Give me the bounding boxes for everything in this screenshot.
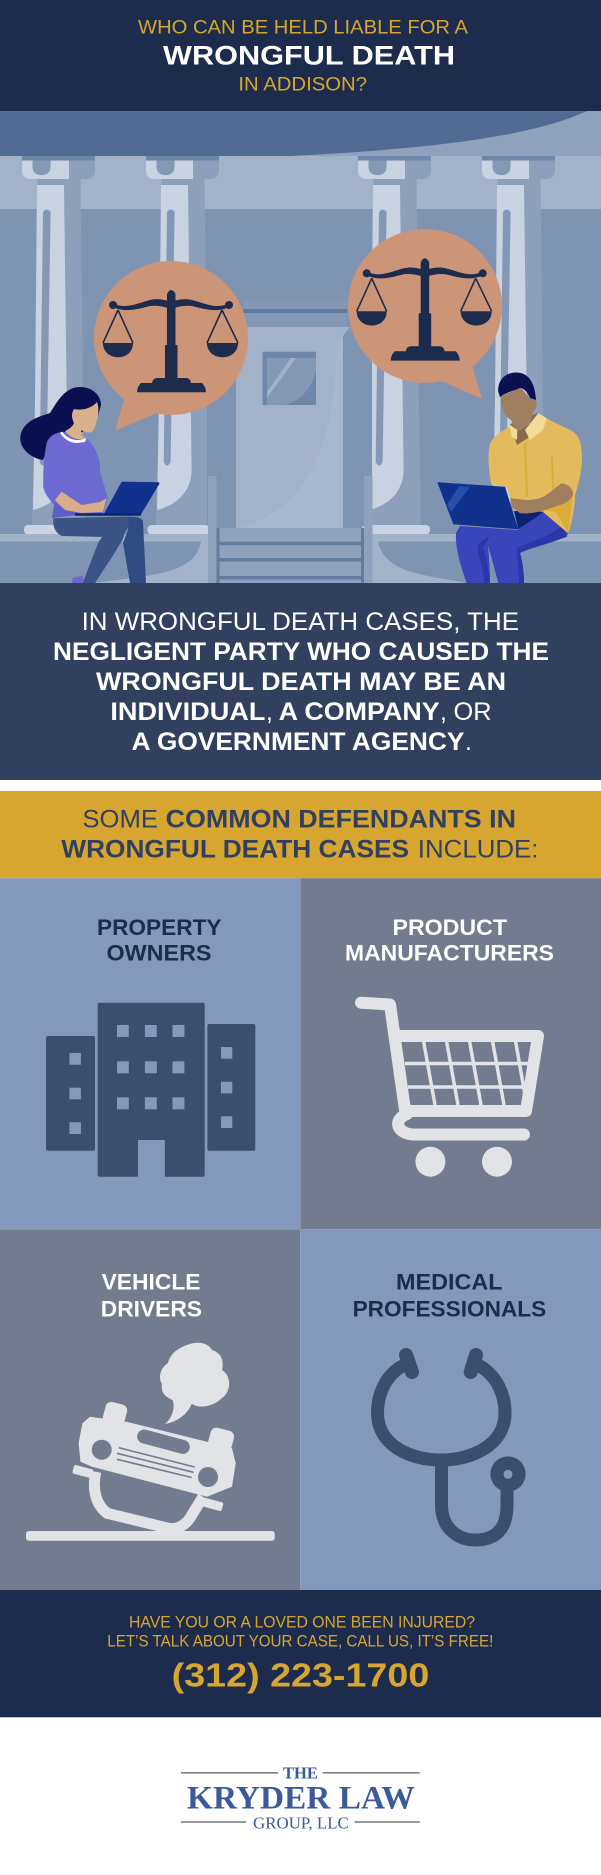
icon: buildings xyxy=(46,1003,255,1177)
gold heading band: SOME xyxy=(82,807,158,834)
speech bubble with scales: left xyxy=(94,261,248,431)
statement panel: IN WRONGFUL DEATH CASES, THE xyxy=(82,609,519,636)
panel: property owners: OWNERS xyxy=(106,941,212,966)
forearm xyxy=(510,483,573,514)
panel: property owners: PROPERTY xyxy=(97,915,222,940)
panel: vehicle drivers xyxy=(0,1229,300,1590)
icon: stethoscope xyxy=(378,1355,526,1540)
neck xyxy=(510,413,538,445)
plinths and steps xyxy=(0,476,601,583)
panel: product manufacturers: PRODUCT xyxy=(392,915,508,940)
panel: medical professionals: PROFESSIONALS xyxy=(353,1297,546,1322)
law firm logo: THE xyxy=(283,1763,318,1782)
gold heading band xyxy=(0,791,601,878)
statement panel: , xyxy=(266,699,273,726)
panel: medical professionals xyxy=(300,1229,601,1590)
laptop xyxy=(514,511,544,529)
speech bubble with scales: right xyxy=(348,229,502,399)
panel: vehicle drivers: VEHICLE xyxy=(102,1269,200,1294)
statement panel: OR xyxy=(454,699,492,726)
hair xyxy=(498,372,536,400)
far leg xyxy=(83,523,128,583)
header banner: IN ADDISON? xyxy=(238,75,367,96)
column 4 xyxy=(482,156,555,526)
hair xyxy=(20,387,101,460)
statement panel: . xyxy=(465,729,472,756)
gold heading band: COMMON DEFENDANTS IN xyxy=(166,807,516,834)
face xyxy=(65,402,98,439)
statement panel: A COMPANY xyxy=(279,699,440,726)
shirt xyxy=(489,418,582,533)
call to action footer: LET’S TALK ABOUT YOUR CASE, CALL US, IT’S FREE! xyxy=(107,1632,493,1651)
law firm logo xyxy=(181,1763,420,1832)
man with laptop xyxy=(437,372,582,583)
law firm logo: GROUP, LLC xyxy=(253,1813,349,1832)
header banner: WRONGFUL DEATH xyxy=(163,40,455,70)
statement panel: WRONGFUL DEATH MAY BE AN xyxy=(96,669,506,696)
column 1 xyxy=(22,156,95,526)
icon: shopping cart xyxy=(361,1003,538,1177)
call to action footer: HAVE YOU OR A LOVED ONE BEEN INJURED? xyxy=(129,1613,475,1632)
panel: vehicle drivers: DRIVERS xyxy=(101,1297,202,1322)
header banner: WHO CAN BE HELD LIABLE FOR A xyxy=(138,18,468,38)
courthouse door and window xyxy=(207,300,372,528)
column 3 xyxy=(358,156,431,526)
gold heading band: WRONGFUL DEATH CASES xyxy=(61,837,409,864)
column 2 xyxy=(146,156,219,526)
gold heading band: INCLUDE: xyxy=(418,837,538,864)
statement panel xyxy=(0,583,601,780)
forearm xyxy=(55,492,107,513)
trousers xyxy=(456,510,568,583)
statement panel: A GOVERNMENT AGENCY xyxy=(132,729,465,756)
shoe xyxy=(72,576,84,583)
header banner xyxy=(0,0,601,111)
call to action footer xyxy=(0,1590,601,1717)
sweater xyxy=(43,432,108,518)
courthouse illustration xyxy=(0,111,601,583)
statement panel: INDIVIDUAL xyxy=(110,699,265,726)
icon: overturned car with smoke xyxy=(26,1343,275,1541)
face xyxy=(500,388,537,430)
woman with laptop xyxy=(20,387,159,583)
near leg xyxy=(123,517,146,583)
panel: property owners xyxy=(0,878,300,1229)
call to action footer: (312) 223-1700 xyxy=(172,1657,429,1694)
law firm logo: KRYDER LAW xyxy=(187,1780,415,1816)
statement panel: , xyxy=(440,699,447,726)
laptop xyxy=(103,482,159,515)
collar xyxy=(509,424,517,440)
panel: product manufacturers xyxy=(300,878,601,1229)
thigh xyxy=(53,516,129,537)
panel: product manufacturers: MANUFACTURERS xyxy=(345,941,554,966)
statement panel: NEGLIGENT PARTY WHO CAUSED THE xyxy=(53,639,549,666)
panel: medical professionals: MEDICAL xyxy=(396,1269,502,1294)
